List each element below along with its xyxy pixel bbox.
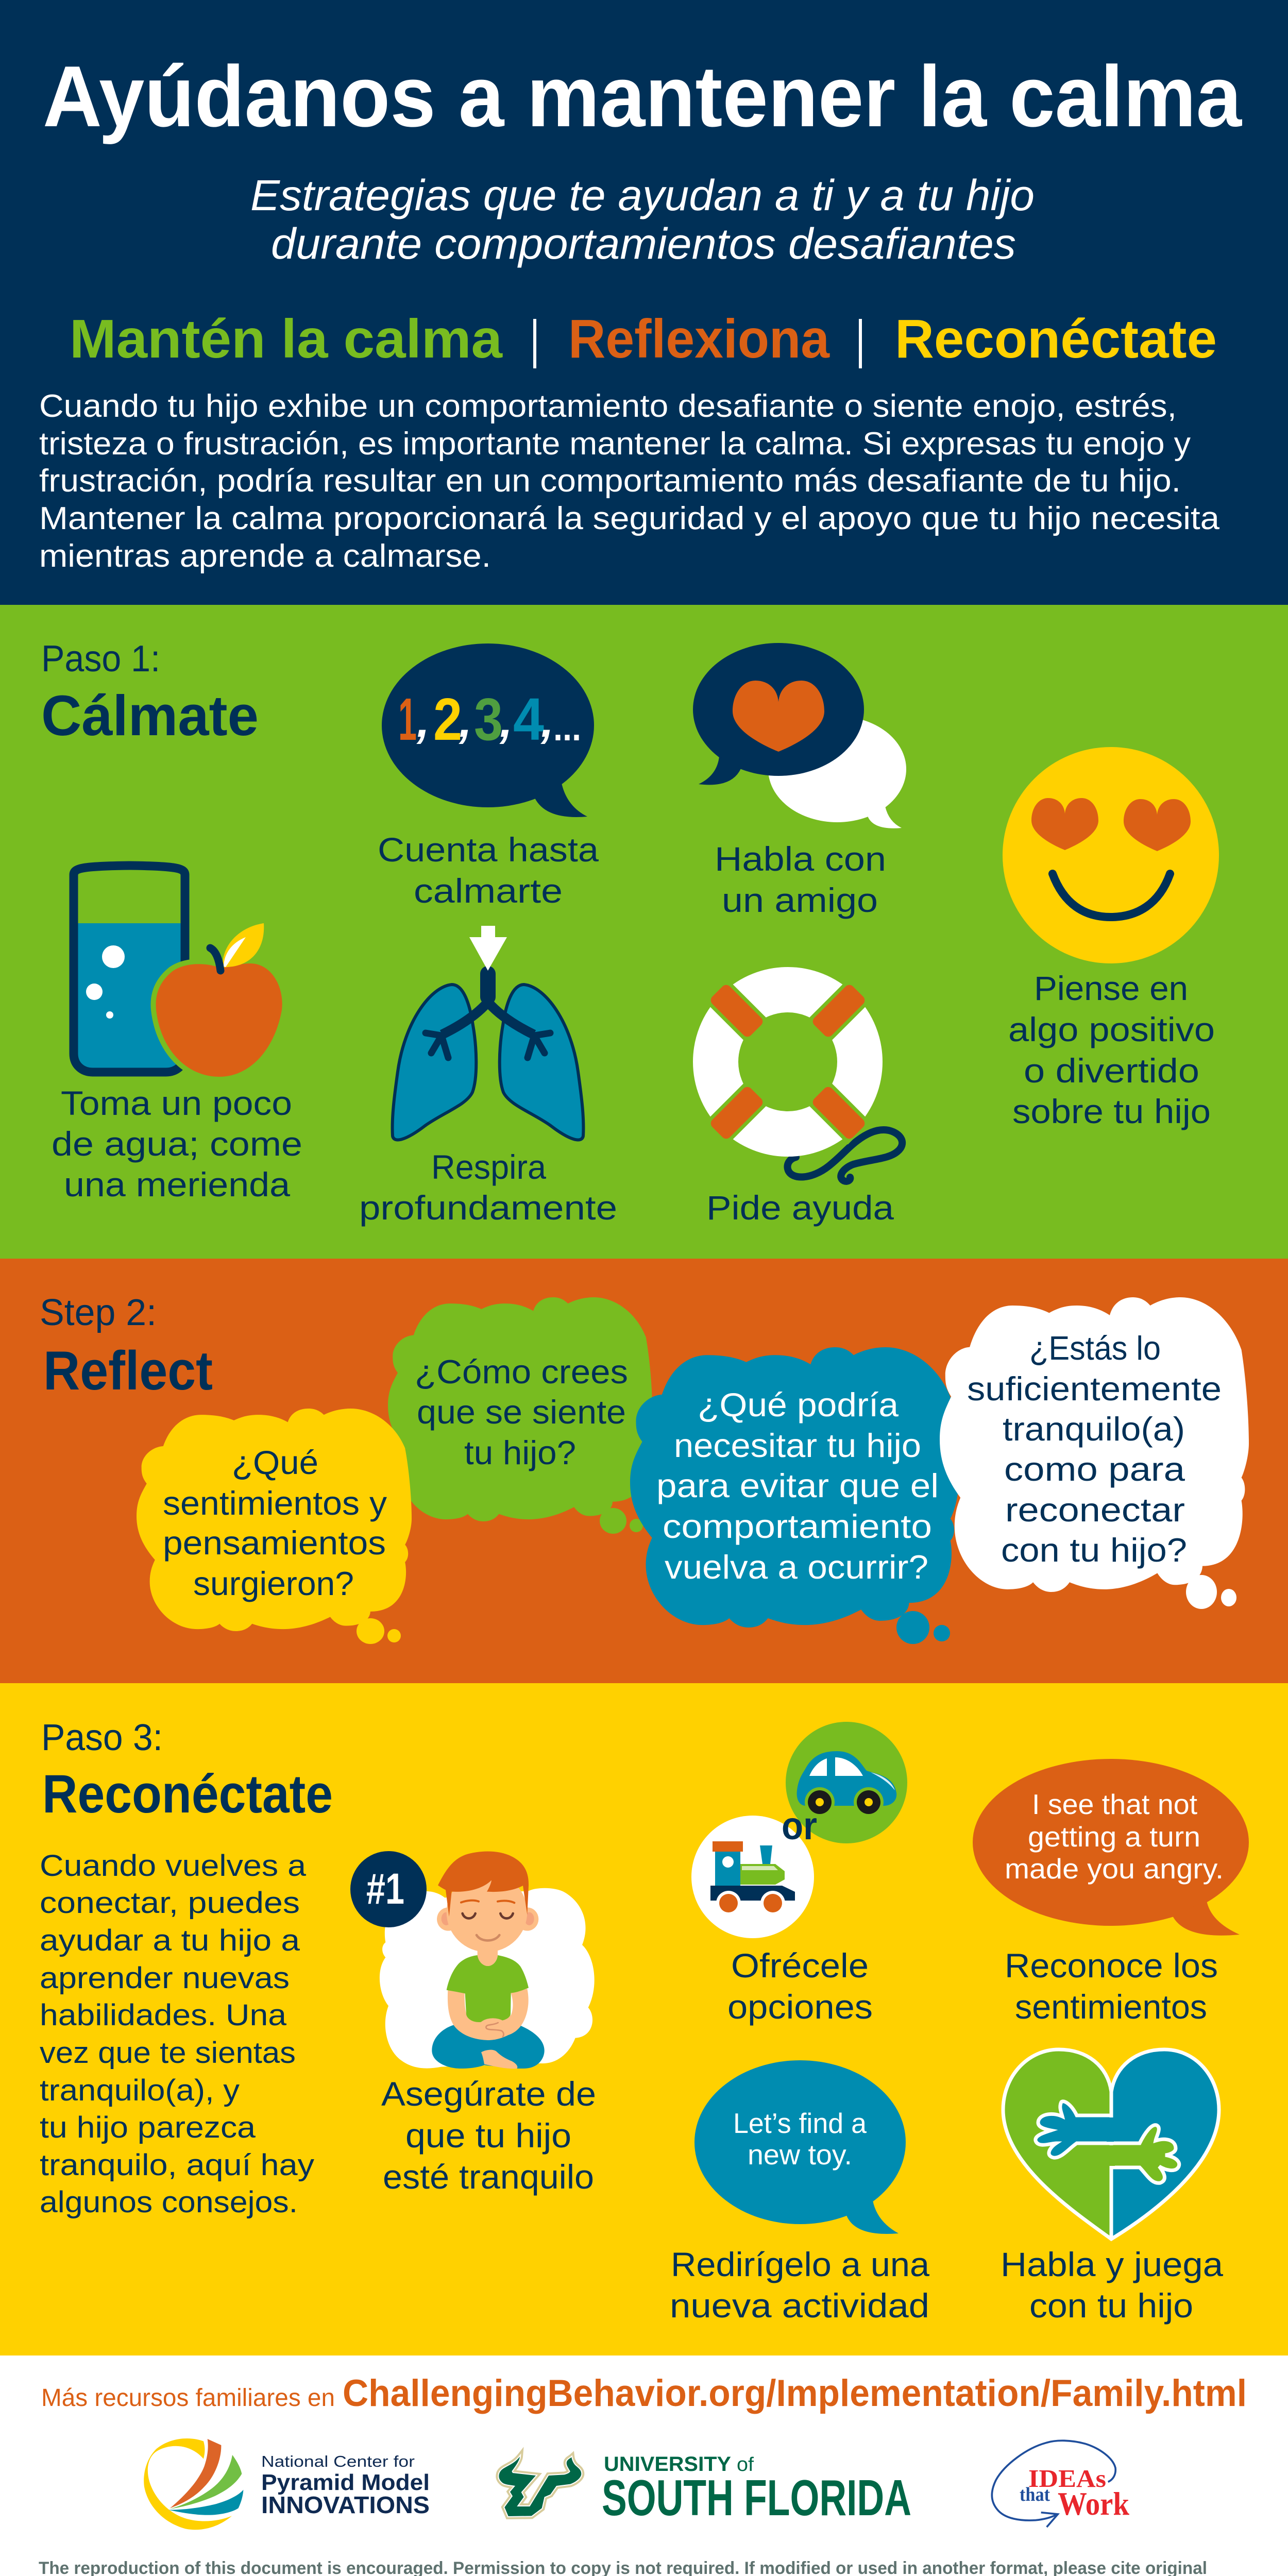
thought cloud: yellow: ¿Qué bbox=[232, 1444, 318, 1481]
logo: university of south florida: UNIVERSITY bbox=[604, 2453, 731, 2476]
caption: breathe: Respira bbox=[431, 1148, 546, 1186]
reconnect paragraph: algunos consejos. bbox=[40, 2185, 298, 2219]
step 3 heading bbox=[41, 1717, 333, 1824]
caption: make sure child is calm: esté tranquilo bbox=[383, 2158, 594, 2196]
icon: toy choices car or train: or bbox=[782, 1804, 817, 1848]
logo: pyramid model innovations bbox=[144, 2438, 430, 2530]
intro paragraph: frustración, podría resultar en un comportamiento más desafiante de tu hijo. bbox=[39, 463, 1181, 499]
panel: step 2 reflect bbox=[0, 1259, 1288, 1683]
thought cloud: white: suficientemente bbox=[967, 1370, 1222, 1408]
step 2 heading: Reflect bbox=[43, 1340, 213, 1401]
resources line: ChallengingBehavior.org/Implementation/Family.html bbox=[343, 2372, 1247, 2414]
reconnect paragraph: ayudar a tu hijo a bbox=[40, 1924, 300, 1957]
thought cloud: green: que se siente bbox=[417, 1393, 626, 1431]
caption: make sure child is calm: Asegúrate de bbox=[381, 2075, 596, 2113]
panel: header bbox=[0, 0, 1288, 605]
caption: talk and play: con tu hijo bbox=[1029, 2286, 1193, 2325]
step 1 heading: Cálmate bbox=[41, 684, 259, 748]
icon: counting speech bubble: 1 bbox=[398, 686, 417, 753]
speech bubble: acknowledge feelings: getting a turn bbox=[1028, 1821, 1200, 1853]
logo: ideas that work: Work bbox=[1058, 2485, 1129, 2522]
icon: counting speech bubble: , bbox=[459, 696, 472, 747]
reconnect paragraph: conectar, puedes bbox=[40, 1886, 300, 1920]
caption: think positive bbox=[1008, 969, 1215, 1130]
caption: redirect bbox=[670, 2245, 929, 2325]
step 3 heading: Paso 3: bbox=[41, 1717, 163, 1758]
step 3 heading: Reconéctate bbox=[42, 1764, 333, 1824]
caption: think positive: algo positivo bbox=[1008, 1010, 1215, 1048]
logo: ideas that work: that bbox=[1020, 2484, 1050, 2505]
logo: pyramid model innovations: Pyramid Model bbox=[261, 2470, 430, 2495]
panel: step 3 reconnect bbox=[0, 1683, 1288, 2355]
icon: smiley with heart eyes bbox=[1003, 747, 1219, 963]
subtitle: Estrategias que te ayudan a ti y a tu hijo bbox=[250, 171, 1035, 219]
caption: redirect: Redirígelo a una bbox=[671, 2245, 929, 2283]
icon: counting speech bubble: 2 bbox=[433, 686, 462, 753]
caption: water: Toma un poco bbox=[61, 1084, 292, 1122]
thought cloud: blue: vuelva a ocurrir? bbox=[665, 1548, 928, 1586]
subtitle bbox=[250, 171, 1035, 268]
speech bubble: acknowledge feelings: made you angry. bbox=[1005, 1853, 1224, 1885]
caption: redirect: nueva actividad bbox=[670, 2286, 929, 2325]
thought cloud: white: tranquilo(a) bbox=[1003, 1410, 1185, 1448]
reconnect paragraph: aprender nuevas bbox=[40, 1961, 290, 1995]
speech bubble: redirect: Let’s find a bbox=[733, 2107, 867, 2139]
speech bubble: acknowledge feelings bbox=[973, 1759, 1249, 1936]
speech bubble: redirect bbox=[694, 2060, 906, 2234]
caption: make sure child is calm bbox=[381, 2075, 596, 2196]
three step headline: Reflexiona bbox=[568, 309, 830, 369]
thought cloud: green bbox=[388, 1297, 652, 1534]
thought cloud: white: con tu hijo? bbox=[1001, 1531, 1187, 1569]
logo: ideas that work: IDEAs bbox=[1028, 2464, 1106, 2493]
thought cloud: white: ¿Estás lo bbox=[1029, 1329, 1161, 1367]
icon: heart with hugging arms bbox=[1003, 2049, 1219, 2239]
logo: university of south florida bbox=[499, 2453, 911, 2526]
three step headline: Reconéctate bbox=[895, 309, 1217, 369]
subtitle: durante comportamientos desafiantes bbox=[271, 219, 1016, 268]
caption: water: una merienda bbox=[64, 1165, 290, 1204]
caption: offer options: Ofrécele bbox=[731, 1946, 869, 1985]
logo: university of south florida: SOUTH FLORIDA bbox=[602, 2469, 911, 2526]
caption: offer options: opciones bbox=[727, 1988, 873, 2026]
caption: friend bbox=[715, 840, 886, 919]
logo: pyramid model innovations: National Center for bbox=[261, 2452, 415, 2470]
thought cloud: green: ¿Cómo crees bbox=[415, 1353, 628, 1391]
step 2 heading bbox=[40, 1292, 213, 1401]
caption: talk and play: Habla y juega bbox=[1001, 2245, 1223, 2283]
icon: calm child in cloud bbox=[350, 1851, 595, 2069]
thought cloud: white bbox=[940, 1297, 1249, 1609]
icon: counting speech bubble: 4 bbox=[513, 686, 544, 753]
caption: breathe: profundamente bbox=[359, 1189, 617, 1227]
title: Ayúdanos a mantener la calma bbox=[43, 48, 1242, 145]
thought cloud: yellow: pensamientos bbox=[163, 1524, 386, 1562]
caption: think positive: o divertido bbox=[1024, 1052, 1199, 1090]
icon: counting speech bubble: , bbox=[540, 696, 554, 747]
intro paragraph bbox=[39, 388, 1220, 574]
thought cloud: blue bbox=[630, 1347, 958, 1644]
step 1 heading: Paso 1: bbox=[41, 638, 160, 680]
caption: acknowledge feelings: Reconoce los bbox=[1005, 1946, 1218, 1985]
caption: acknowledge feelings bbox=[1005, 1946, 1218, 2026]
thought cloud: white: reconectar bbox=[1005, 1491, 1185, 1529]
badge: number one bbox=[350, 1851, 427, 1927]
reconnect paragraph: habilidades. Una bbox=[40, 1998, 287, 2032]
reconnect paragraph: vez que te sientas bbox=[40, 2036, 296, 2070]
thought cloud: blue: para evitar que el bbox=[656, 1467, 939, 1504]
icon: counting speech bubble: ... bbox=[553, 707, 581, 749]
intro paragraph: tristeza o frustración, es importante mantener la calma. Si expresas tu enojo y bbox=[39, 426, 1191, 462]
caption: friend: Habla con bbox=[715, 840, 886, 878]
panel: step 1 calm bbox=[0, 605, 1288, 1259]
speech bubble: redirect: new toy. bbox=[748, 2139, 852, 2171]
icon: counting speech bubble: , bbox=[416, 696, 430, 747]
reconnect paragraph: tu hijo parezca bbox=[40, 2111, 256, 2144]
caption: friend: un amigo bbox=[722, 881, 878, 919]
caption: count: calmarte bbox=[414, 872, 563, 910]
caption: think positive: sobre tu hijo bbox=[1012, 1092, 1211, 1130]
speech bubble: acknowledge feelings: I see that not bbox=[1032, 1788, 1197, 1820]
logo: pyramid model innovations: INNOVATIONS bbox=[261, 2492, 430, 2518]
thought cloud: green: tu hijo? bbox=[464, 1434, 576, 1471]
caption: think positive: Piense en bbox=[1034, 969, 1188, 1007]
three step headline: Mantén la calma bbox=[70, 309, 503, 369]
resources line: Más recursos familiares en bbox=[41, 2384, 335, 2412]
reconnect paragraph: Cuando vuelves a bbox=[40, 1849, 307, 1883]
reconnect paragraph: tranquilo(a), y bbox=[40, 2074, 240, 2107]
step 1 heading bbox=[41, 638, 259, 748]
reconnect paragraph: tranquilo, aquí hay bbox=[40, 2148, 314, 2182]
caption: make sure child is calm: que tu hijo bbox=[405, 2116, 571, 2155]
caption: acknowledge feelings: sentimientos bbox=[1015, 1988, 1207, 2026]
logo: ideas that work bbox=[992, 2441, 1129, 2527]
icon: friend chat bubbles bbox=[693, 643, 906, 828]
thought cloud: blue: comportamiento bbox=[663, 1507, 932, 1545]
reconnect paragraph bbox=[40, 1849, 314, 2219]
icon: toy choices car or train bbox=[691, 1722, 907, 1938]
thought cloud: blue: ¿Qué podría bbox=[698, 1386, 899, 1423]
caption: count: Cuenta hasta bbox=[378, 831, 599, 869]
icon: counting speech bubble: 3 bbox=[474, 686, 503, 753]
caption: water bbox=[52, 1084, 302, 1204]
intro paragraph: Mantener la calma proporcionará la seguridad y el apoyo que tu hijo necesita bbox=[39, 501, 1220, 536]
caption: offer options bbox=[727, 1946, 873, 2026]
intro paragraph: Cuando tu hijo exhibe un comportamiento desafiante o siente enojo, estrés, bbox=[39, 388, 1177, 424]
icon: counting speech bubble bbox=[382, 643, 594, 817]
three step headline bbox=[70, 309, 1217, 369]
thought cloud: yellow: surgieron? bbox=[193, 1565, 354, 1602]
thought cloud: white: como para bbox=[1004, 1450, 1185, 1488]
caption: water: de agua; come bbox=[52, 1125, 302, 1163]
caption: ask for help: Pide ayuda bbox=[706, 1189, 894, 1227]
caption: breathe bbox=[359, 1148, 617, 1227]
panel: footer bbox=[0, 2355, 1288, 2576]
thought cloud: blue: necesitar tu hijo bbox=[674, 1427, 921, 1464]
badge: number one: #1 bbox=[366, 1865, 404, 1913]
intro paragraph: mientras aprende a calmarse. bbox=[39, 538, 491, 574]
caption: count bbox=[378, 831, 599, 910]
step 2 heading: Step 2: bbox=[40, 1292, 157, 1333]
thought cloud: yellow: sentimientos y bbox=[163, 1484, 387, 1522]
icon: water glass and apple bbox=[74, 866, 282, 1077]
icon: life ring with rope bbox=[705, 979, 902, 1181]
icon: counting speech bubble: , bbox=[499, 696, 513, 747]
caption: talk and play bbox=[1001, 2245, 1223, 2325]
logo: university of south florida: of bbox=[737, 2454, 754, 2476]
thought cloud: yellow bbox=[137, 1409, 412, 1644]
icon: lungs bbox=[393, 926, 583, 1140]
